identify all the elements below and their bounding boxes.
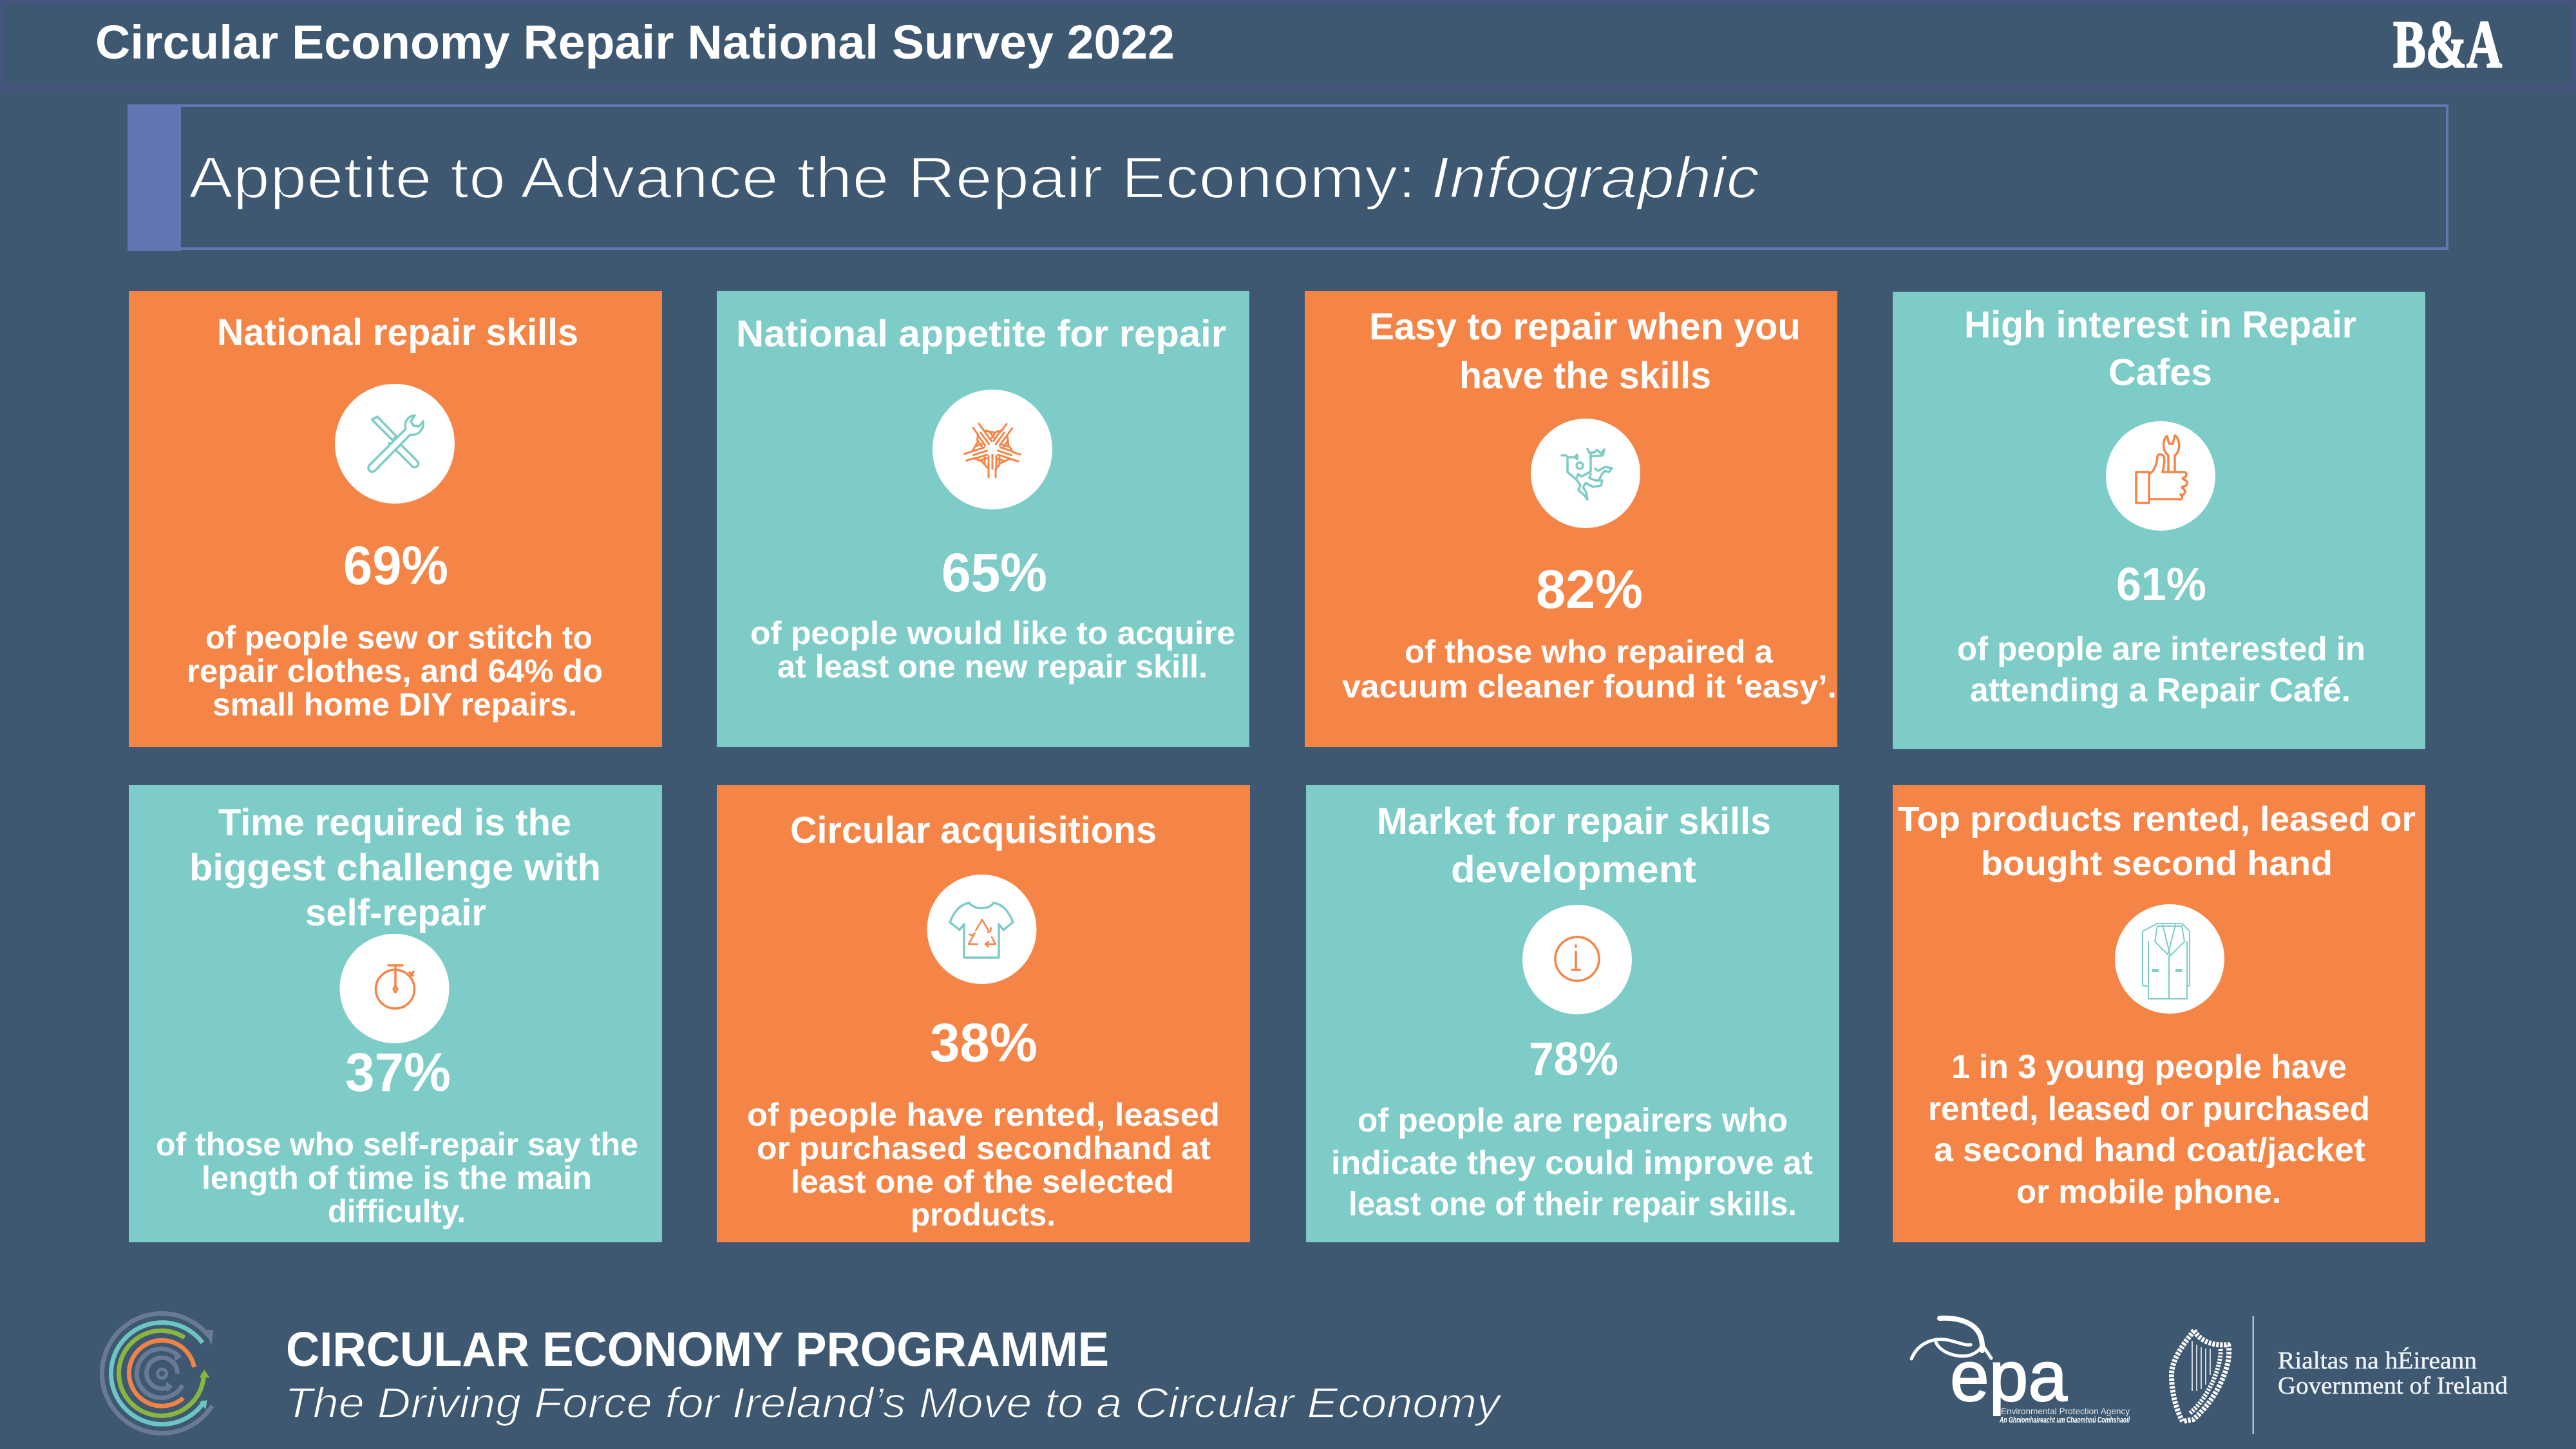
description: difficulty.	[328, 1193, 466, 1229]
logo: EPA: Environmental Protection Agency	[2001, 1406, 2130, 1416]
description: products.	[911, 1197, 1056, 1233]
heading: High interest in Repair	[1964, 304, 2356, 346]
description: small home DIY repairs.	[213, 687, 577, 723]
page title box	[128, 104, 2447, 251]
panel: national repair skills	[129, 291, 662, 747]
panel: market for repair skills	[1306, 785, 1839, 1242]
page title: Infographic	[1431, 146, 1759, 211]
heading: biggest challenge with	[189, 847, 601, 889]
description: rented, leased or purchased	[1928, 1090, 2370, 1128]
logo: harp	[2172, 1331, 2229, 1421]
description: of people sew or stitch to	[205, 620, 592, 656]
description: of those who self-repair say the	[156, 1126, 638, 1162]
description	[1331, 1102, 1813, 1223]
description: vacuum cleaner found it ‘easy’.	[1342, 668, 1837, 705]
description	[1957, 630, 2365, 709]
heading: Easy to repair when you	[1369, 306, 1801, 348]
icon: thumbs up holding wrench	[2106, 421, 2215, 531]
description: a second hand coat/jacket	[1934, 1132, 2365, 1169]
description	[750, 615, 1235, 685]
heading: Time required is the	[218, 802, 571, 844]
statistic: 82%	[1536, 559, 1643, 620]
survey title: Circular Economy Repair National Survey 2022	[95, 15, 1175, 69]
description: or purchased secondhand at	[757, 1130, 1211, 1166]
heading: National repair skills	[217, 312, 578, 354]
description: of people would like to acquire	[750, 615, 1235, 651]
statistic: 37%	[345, 1042, 451, 1103]
panel: easy to repair	[1305, 291, 1837, 747]
heading: have the skills	[1459, 355, 1711, 397]
description: attending a Repair Café.	[1970, 672, 2351, 709]
logo: circular economy rings	[102, 1313, 214, 1433]
heading	[1964, 304, 2356, 393]
description: at least one new repair skill.	[777, 649, 1208, 685]
government of Ireland wordmark: Rialtas na hÉireann	[2278, 1347, 2477, 1374]
divider line	[2253, 1316, 2254, 1434]
icon: figure juggling tools	[1531, 419, 1640, 528]
description: 1 in 3 young people have	[1951, 1048, 2347, 1086]
statistic: 65%	[942, 542, 1047, 603]
statistic: 78%	[1529, 1034, 1618, 1085]
heading: Top products rented, leased or	[1898, 800, 2416, 838]
page title: Appetite to Advance the Repair Economy:	[189, 146, 1416, 211]
panel: time challenge	[129, 785, 662, 1242]
icon: circle of hands	[933, 390, 1052, 509]
icon: stopwatch	[340, 934, 450, 1043]
statistic: 38%	[930, 1012, 1037, 1073]
logo: EPA: epa	[1950, 1337, 2068, 1416]
description	[187, 620, 603, 723]
panel: repair cafes	[1893, 292, 2425, 749]
description	[156, 1126, 638, 1229]
icon: t-shirt with recycling symbol	[927, 875, 1037, 984]
heading	[1898, 800, 2416, 883]
government of Ireland wordmark: Government of Ireland	[2278, 1372, 2508, 1399]
panel: national appetite for repair	[717, 291, 1249, 747]
description	[1342, 634, 1837, 705]
description: least one of their repair skills.	[1349, 1186, 1797, 1223]
heading: National appetite for repair	[736, 313, 1226, 355]
panel: circular acquisitions	[717, 785, 1250, 1242]
logo: EPA	[1911, 1318, 2130, 1425]
description	[747, 1097, 1220, 1233]
icon: coat	[2115, 904, 2224, 1014]
statistic: 61%	[2116, 559, 2206, 611]
government of Ireland wordmark	[2278, 1347, 2508, 1399]
description: indicate they could improve at	[1331, 1144, 1813, 1182]
programme name: CIRCULAR ECONOMY PROGRAMME	[286, 1322, 1109, 1376]
description: of people are repairers who	[1358, 1102, 1788, 1139]
heading	[1377, 800, 1771, 891]
statistic: 69%	[343, 535, 448, 596]
heading: Market for repair skills	[1377, 800, 1771, 842]
icon: information	[1522, 905, 1632, 1014]
heading: bought second hand	[1981, 844, 2333, 883]
icon: crossed tools	[335, 384, 455, 504]
page title	[189, 146, 1759, 211]
heading: self-repair	[305, 892, 486, 934]
description: of people are interested in	[1957, 630, 2365, 668]
description: least one of the selected	[791, 1164, 1174, 1200]
heading: Cafes	[2108, 352, 2212, 393]
description: of those who repaired a	[1405, 634, 1774, 670]
heading	[189, 802, 601, 934]
description: of people have rented, leased	[747, 1097, 1220, 1133]
description: length of time is the main	[202, 1160, 592, 1196]
heading: Circular acquisitions	[790, 810, 1157, 851]
heading: development	[1451, 849, 1696, 891]
programme strapline: The Driving Force for Ireland’s Move to a Circular Economy	[285, 1379, 1502, 1426]
heading	[1369, 306, 1801, 397]
panel: top products	[1893, 785, 2425, 1242]
description: repair clothes, and 64% do	[187, 653, 603, 689]
description: or mobile phone.	[2016, 1173, 2281, 1211]
header band	[2, 2, 2574, 88]
logo: B&amp;A: B&A	[2393, 6, 2502, 82]
description	[1928, 1048, 2370, 1211]
logo: EPA: An Ghníomhaireacht um Chaomhnú Comhshaoil	[1999, 1415, 2130, 1425]
